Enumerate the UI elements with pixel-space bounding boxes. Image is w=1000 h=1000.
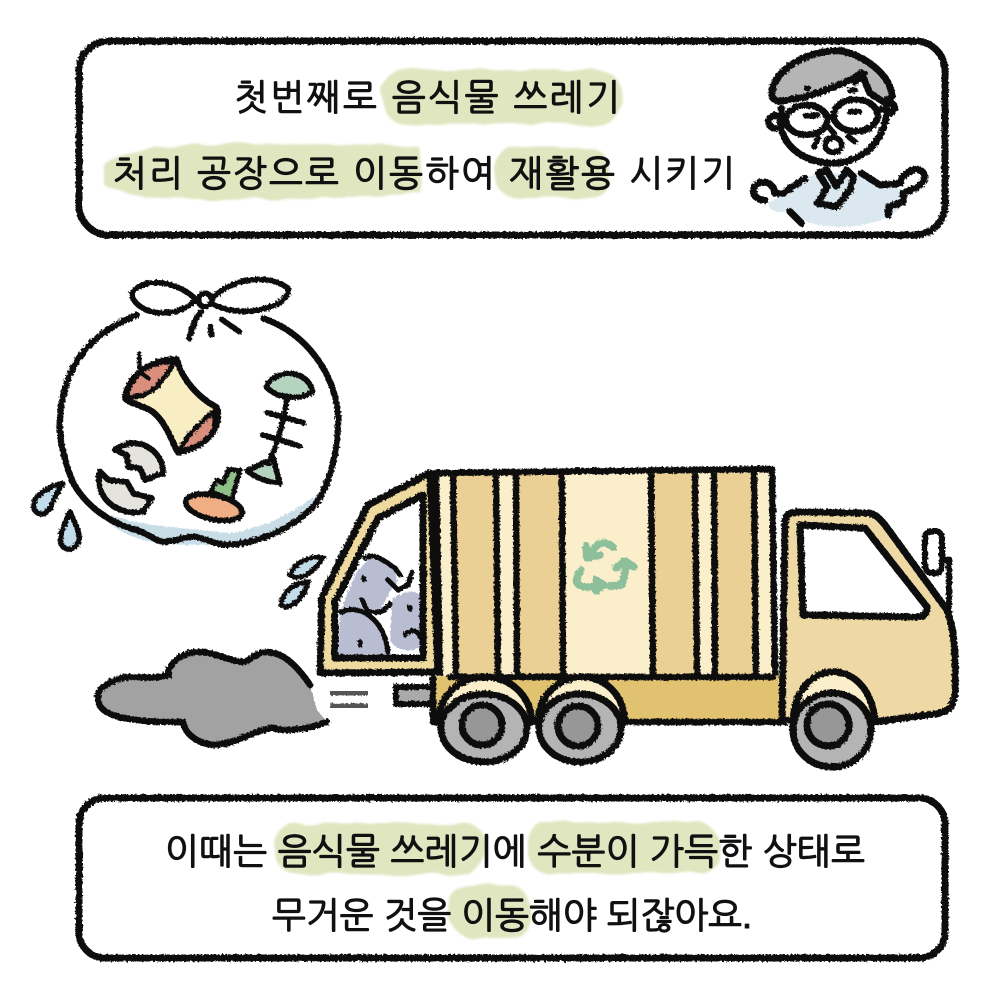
- box lines: [435, 469, 775, 677]
- carrot top: [211, 470, 240, 500]
- wheel 3: [793, 672, 875, 767]
- icon: presenter character: [753, 51, 925, 227]
- exhaust lines: [332, 692, 366, 707]
- apple skin: [127, 362, 215, 452]
- wheel 2: [538, 677, 625, 762]
- bag front: [338, 609, 388, 655]
- facial features: [806, 73, 865, 152]
- door window frame: [335, 495, 423, 658]
- smoke outline: [98, 652, 327, 745]
- bottom caption panel: [79, 798, 945, 958]
- recycling symbol: [577, 543, 634, 591]
- bottom caption text line 1: 이때는 음식물 쓰레기에 수분이 가득한 상태로: [165, 831, 865, 872]
- fish bone: [247, 374, 313, 483]
- door water drops: [281, 557, 323, 607]
- hair: [772, 51, 893, 102]
- water drops: [33, 483, 79, 549]
- exhaust pipe: [396, 687, 430, 704]
- bag outline: [60, 315, 338, 545]
- cab window: [800, 525, 927, 617]
- box tan stripes: [453, 473, 754, 677]
- bottom highlights: [275, 822, 718, 938]
- top panel frame: [79, 41, 945, 235]
- bag top: [340, 557, 397, 612]
- shirt: [768, 173, 906, 227]
- arms and collar: [753, 169, 925, 223]
- cab: [782, 512, 955, 722]
- wheel 1: [438, 677, 532, 762]
- chassis: [432, 676, 785, 722]
- top highlights: [104, 70, 622, 200]
- garbage truck: [281, 469, 955, 767]
- smoke fill: [98, 652, 327, 745]
- chassis lines: [433, 677, 785, 722]
- open rear door: [320, 473, 438, 673]
- garbage bag thought bubble: [33, 279, 338, 549]
- apple core: [125, 359, 218, 453]
- garbage bags: [338, 556, 423, 655]
- top caption text line 2: 처리 공장으로 이동하여 재활용 시키기: [113, 153, 735, 194]
- bag outlines and knots: [341, 556, 420, 652]
- recycling arrows: [577, 543, 634, 591]
- carrot: [183, 490, 245, 525]
- side mirror: [925, 531, 949, 612]
- eggshell pieces: [99, 443, 163, 512]
- bag water: [95, 482, 332, 545]
- door window: [335, 495, 423, 658]
- bottom caption text line 2: 무거운 것을 이동해야 되잖아요.: [272, 895, 752, 936]
- cargo box: [435, 469, 775, 677]
- top caption text line 1: 첫번째로 음식물 쓰레기: [234, 77, 620, 118]
- smoke cloud: [98, 652, 327, 745]
- bag knot: [132, 279, 288, 338]
- face: [769, 102, 895, 163]
- bag right: [390, 592, 423, 650]
- top caption panel: [79, 41, 945, 235]
- bottom panel frame: [79, 798, 945, 958]
- apple stem: [139, 353, 148, 378]
- glasses: [786, 99, 887, 135]
